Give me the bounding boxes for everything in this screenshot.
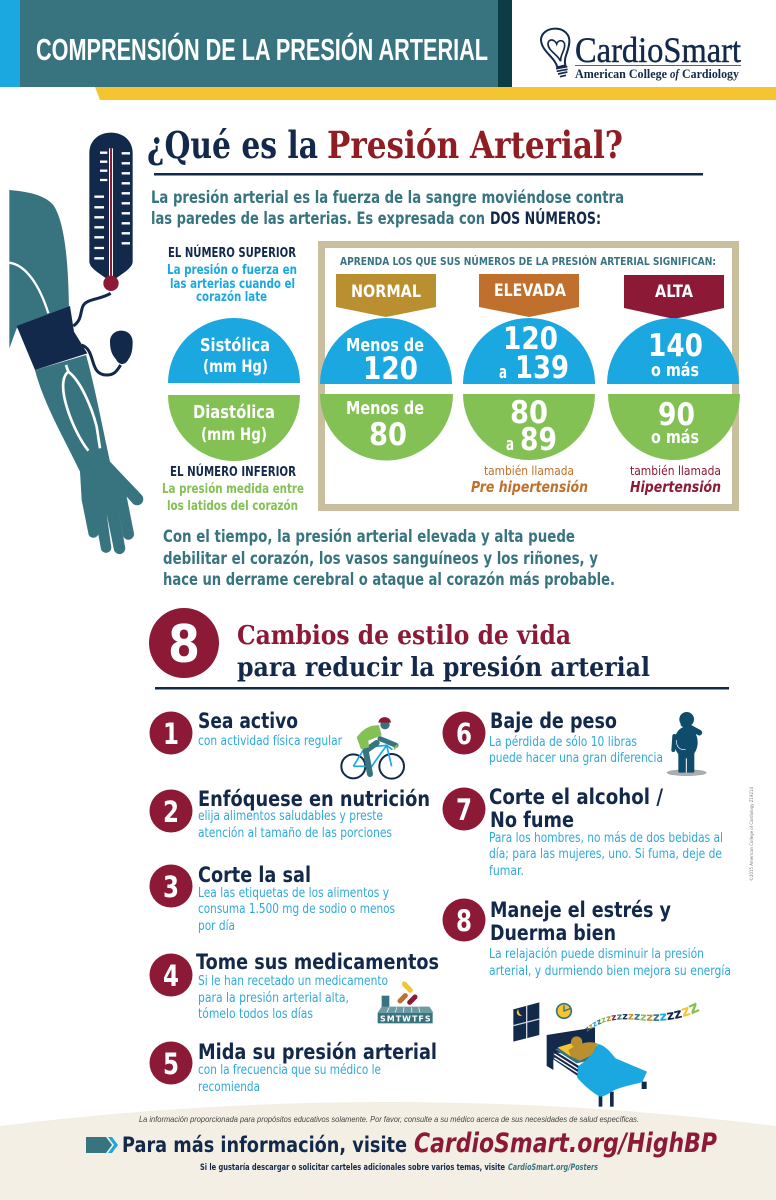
sleep letters: zzzzzzzzzzzzzzzzzzzz [585, 1002, 700, 1032]
column: normal [320, 274, 453, 461]
item 7: alcohol and smoking: fumar. [489, 864, 524, 879]
item 2: nutrition: 2 [163, 795, 179, 829]
forearm and hand [35, 355, 143, 554]
main heading: Presión Arterial? [327, 123, 623, 167]
item 3: cut salt: Lea las etiquetas de los alimentos y [198, 886, 389, 901]
item 8: stress and sleep [442, 898, 731, 979]
disclaimer: La información proporcionada para propósitos educativos solamente. Por favor, consulte a su médico acerca de sus necesidades de salud específicas. [139, 1114, 639, 1124]
copyright note: ©2015 American College of Cardiology Z19214 [748, 787, 755, 881]
item 8: stress and sleep: La relajación puede disminuir la presión [489, 947, 704, 962]
consequences paragraph [163, 527, 615, 590]
column: normal: Menos de [346, 398, 424, 419]
icon: sleeping person in bed [513, 1002, 700, 1107]
section heading: 8 lifestyle changes: Cambios de estilo de vida [237, 621, 571, 651]
column: elevated: a [499, 362, 507, 383]
item 3: cut salt [150, 863, 395, 934]
diastolic half circle: Diastólica [193, 402, 275, 423]
item 5: measure pressure [150, 1040, 437, 1095]
item 1: be active: con actividad física regular [198, 734, 343, 749]
column: normal: NORMAL [351, 282, 421, 302]
label: bottom number: los latidos del corazón [167, 499, 298, 514]
consequences paragraph: hace un derrame cerebral o ataque al corazón más probable. [163, 570, 615, 590]
item 6: lose weight: 6 [456, 717, 472, 751]
systolic half circle: (mm Hg) [203, 357, 268, 377]
item 7: alcohol and smoking: Corte el alcohol / [489, 785, 663, 809]
item 3: cut salt: 3 [163, 870, 179, 904]
label: bottom number: EL NÚMERO INFERIOR [170, 464, 296, 480]
main heading [147, 123, 703, 176]
item 5: measure pressure: recomienda [198, 1080, 260, 1095]
label: bottom number: La presión medida entre [162, 482, 304, 497]
footer band: CardioSmart.org/Posters [508, 1163, 598, 1173]
column: high: o más [651, 427, 699, 448]
systolic half circle: Sistólica [200, 335, 270, 356]
item 4: medication: 4 [163, 959, 179, 993]
item 4: medication [150, 950, 439, 1022]
column: high: Hipertensión [630, 478, 721, 496]
column: elevated [463, 274, 595, 496]
item 7: alcohol and smoking: Para los hombres, no más de dos bebidas al [489, 831, 723, 846]
icon: pill box [378, 984, 433, 1023]
icon: pill box: SMTWTFS [380, 1014, 431, 1023]
column: high: 90 [658, 397, 695, 433]
icon: overweight person [667, 712, 707, 776]
systolic half circle [168, 318, 300, 383]
column: normal: Menos de [346, 335, 424, 356]
footer band: CardioSmart.org/HighBP [414, 1128, 717, 1159]
item 3: cut salt: consuma 1.500 mg de sodio o menos [198, 902, 395, 917]
intro paragraph: DOS NÚMEROS: [490, 207, 601, 229]
arm with blood pressure cuff illustration [9, 133, 143, 554]
item 8: stress and sleep: Duerma bien [490, 921, 616, 945]
item 6: lose weight: puede hacer una gran diferencia [489, 751, 663, 766]
item 4: medication: Tome sus medicamentos [196, 950, 439, 974]
label: top number: La presión o fuerza en [167, 263, 297, 278]
call to action: Para más información, visite [122, 1133, 407, 1157]
label: top number: las arterias cuando el [170, 277, 295, 292]
column: elevated: 120 [503, 321, 558, 357]
consequences paragraph: Con el tiempo, la presión arterial elevada y alta puede [163, 527, 575, 547]
icon: arrow [86, 1137, 118, 1153]
column: elevated: a [506, 434, 514, 455]
upper arm [9, 190, 69, 348]
item 2: nutrition: elija alimentos saludables y preste [198, 809, 383, 824]
column: elevated: Pre hipertensión [471, 478, 588, 496]
item 6: lose weight: La pérdida de sólo 10 libras [489, 735, 637, 750]
item 2: nutrition [150, 787, 430, 841]
item 1: be active: Sea activo [198, 709, 298, 733]
cuff and tubing [17, 293, 133, 375]
section heading: 8 lifestyle changes: para reducir la presión arterial [237, 653, 650, 683]
header band [0, 0, 776, 100]
footer band [0, 1102, 776, 1200]
logo: CardioSmart: CardioSmart [575, 30, 741, 70]
diastolic half circle: (mm Hg) [201, 425, 267, 445]
column: elevated: 80 [510, 395, 548, 431]
label: bottom number [162, 464, 304, 514]
item 3: cut salt: por día [198, 919, 235, 934]
column: normal: 120 [363, 351, 418, 387]
posters note: Si le gustaría descargar o solicitar carteles adicionales sobre varios temas, visite [200, 1163, 505, 1173]
label: top number: EL NÚMERO SUPERIOR [168, 245, 296, 261]
column: high: también llamada [630, 464, 721, 478]
column: high: ALTA [655, 282, 694, 302]
label: top number: corazón late [196, 290, 267, 305]
logo: CardioSmart: Cardiology [682, 66, 739, 81]
panel: what your numbers mean [320, 244, 740, 508]
label: top number [167, 245, 297, 305]
logo: CardioSmart: of [670, 66, 680, 81]
item 6: lose weight [442, 709, 663, 766]
intro paragraph: las paredes de las arterias. Es expresada con [151, 209, 485, 229]
column: elevated: 139 [515, 350, 569, 386]
intro paragraph [151, 188, 624, 229]
icon: light bulb with heart [541, 29, 569, 77]
column: elevated: también llamada [484, 464, 574, 478]
section heading: 8 lifestyle changes [149, 608, 729, 690]
logo: CardioSmart: American College [575, 66, 667, 81]
item 8: stress and sleep: 8 [456, 904, 472, 938]
item 3: cut salt: Corte la sal [198, 863, 311, 887]
column: normal: 80 [369, 417, 407, 453]
column: high: o más [651, 360, 699, 381]
item 4: medication: tómelo todos los días [198, 1007, 313, 1022]
item 5: measure pressure: con la frecuencia que su médico le [198, 1063, 381, 1078]
main heading: ¿Qué es la [147, 123, 318, 167]
column: high: 140 [648, 328, 703, 364]
item 6: lose weight: Baje de peso [490, 709, 617, 733]
item 2: nutrition: Enfóquese en nutrición [198, 787, 430, 811]
item 5: measure pressure: 5 [163, 1047, 179, 1081]
item 7: alcohol and smoking: No fume [490, 808, 574, 832]
item 8: stress and sleep: Maneje el estrés y [490, 898, 671, 922]
item 1: be active [150, 709, 343, 754]
item 4: medication: Si le han recetado un medicamento [198, 974, 388, 989]
column: elevated: ELEVADA [494, 281, 567, 301]
header title: COMPRENSIÓN DE LA PRESIÓN ARTERIAL [36, 31, 488, 67]
item 4: medication: para la presión arterial alta, [198, 991, 349, 1006]
thermometer gauge [89, 133, 133, 291]
column: elevated: 89 [520, 422, 557, 458]
consequences paragraph: debilitar el corazón, los vasos sanguíneos y los riñones, y [163, 549, 598, 569]
item 7: alcohol and smoking: 7 [456, 793, 472, 827]
column: high [607, 275, 740, 496]
item 2: nutrition: atención al tamaño de las porciones [198, 826, 392, 841]
section heading: 8 lifestyle changes: 8 [168, 615, 200, 675]
item 7: alcohol and smoking [442, 785, 723, 879]
icon: cyclist [341, 717, 404, 779]
intro paragraph: La presión arterial es la fuerza de la sangre moviéndose contra [151, 188, 624, 208]
item 1: be active: 1 [163, 717, 179, 751]
item 7: alcohol and smoking: día; para las mujeres, uno. Si fuma, deje de [489, 847, 722, 862]
diastolic half circle [168, 395, 300, 461]
item 8: stress and sleep: arterial, y durmiendo bien mejora su energía [489, 964, 731, 979]
item 5: measure pressure: Mida su presión arterial [198, 1040, 437, 1064]
logo: CardioSmart [541, 29, 741, 81]
